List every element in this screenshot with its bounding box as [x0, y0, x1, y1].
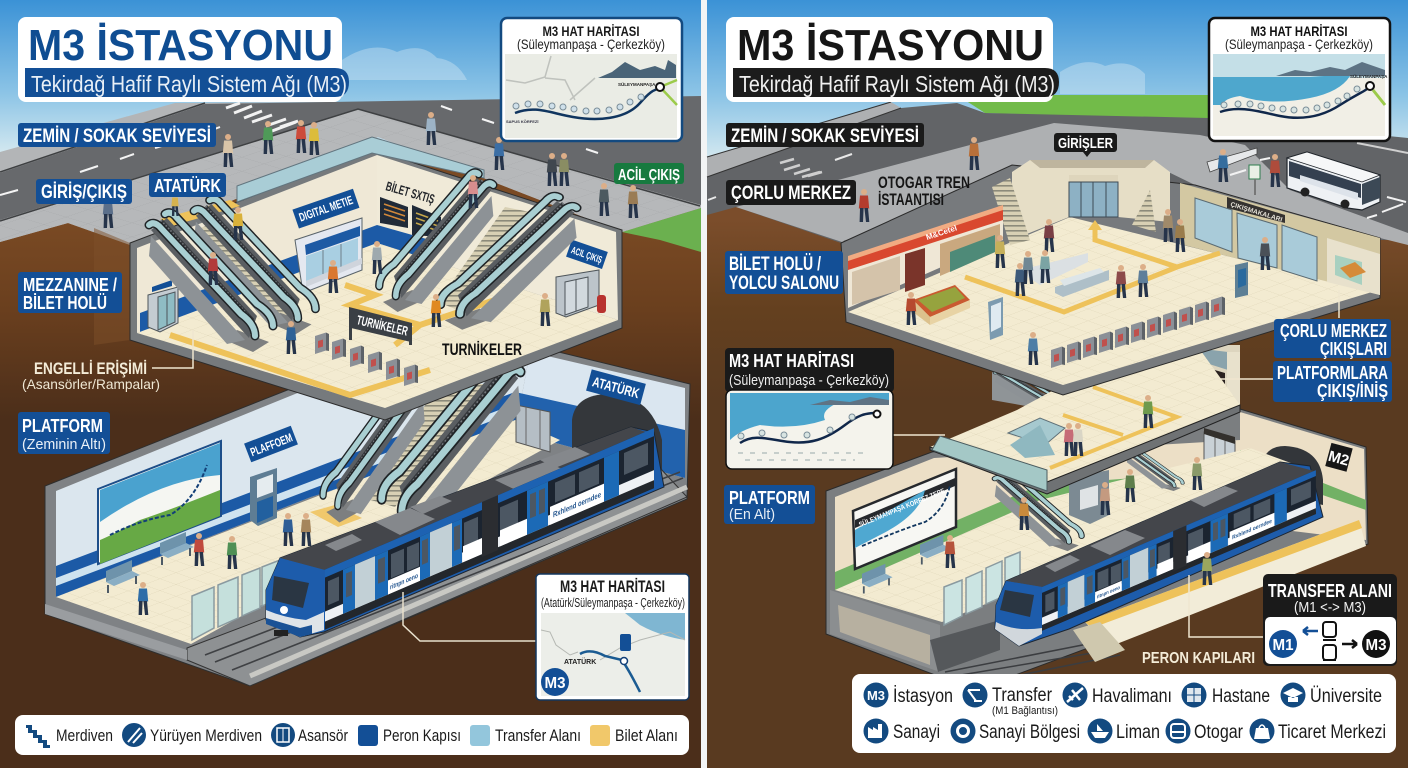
arrows and trains [1303, 622, 1357, 660]
glass wall [1180, 183, 1380, 295]
label: platformlara [1215, 361, 1392, 402]
label: çorlu merkez: ÇORLU MERKEZ [731, 183, 851, 204]
sign: atatürk: ATATÜRK [591, 373, 641, 401]
background: streets [707, 102, 1408, 245]
label: acil çıkış: ACİL ÇIKIŞ [618, 166, 680, 184]
glass gates right [944, 552, 1020, 625]
label: atatürk: ATATÜRK [154, 176, 221, 196]
title card right: M3 İSTASYONU [737, 21, 1044, 70]
floor: platform [56, 420, 560, 644]
map card: bottom left: (Atatürk/Süleymanpaşa - Çerkezköy) [541, 595, 685, 610]
label: bilet holü [725, 251, 843, 294]
label: otogar tren istasyonu: İSTAANTISI [878, 190, 944, 209]
elevator platform [516, 405, 550, 452]
yellow entry [160, 200, 240, 226]
map card: top right: M3 HAT HARİTASI [1250, 23, 1348, 39]
dark sign band [1122, 345, 1240, 407]
sign: acil çıkış [566, 240, 608, 269]
icon: stairs [26, 725, 50, 748]
benches right [862, 535, 951, 594]
map card: bottom left: M3 HAT HARİTASI [560, 577, 665, 596]
legend: otogar: Otogar [1194, 722, 1244, 743]
label: giriş çıkış [36, 179, 132, 204]
stairs right [438, 207, 530, 315]
title card right: Tekirdağ Hafif Raylı Sistem Ağı (M3) [739, 71, 1055, 97]
icon: shopping [1250, 718, 1274, 744]
floor: platform [835, 448, 1310, 622]
escalators right [379, 173, 577, 330]
tracks right [945, 640, 1120, 684]
label: platform en alt [724, 485, 815, 524]
label: platform [18, 412, 110, 454]
label: peron kapıları: PERON KAPILARI [1142, 650, 1255, 667]
swatch: peron kapısı [358, 725, 378, 746]
panel: right concourse [841, 160, 1380, 395]
icon: airport [1062, 682, 1088, 708]
label: girişler [1054, 133, 1117, 157]
icon: m3 istasyon [864, 682, 888, 708]
turnstiles right [1051, 296, 1225, 368]
map card: top left: M3 HAT HARİTASI [542, 23, 640, 39]
elevator right [1204, 428, 1235, 484]
person on middle level [1064, 395, 1153, 456]
title card left [18, 17, 349, 102]
bus stop sign [1249, 165, 1260, 195]
sign: platform: PLAFFOEM [248, 431, 294, 459]
legend: hastane: Hastane [1212, 686, 1270, 707]
legend: istasyon: İstasyon [893, 686, 953, 707]
map card: top right: SÜLEYMANPAŞA [1350, 73, 1388, 79]
legend: merdiven: Merdiven [56, 726, 113, 745]
label: atatürk [149, 173, 226, 197]
label: çorlu merkez çıkışları [1274, 290, 1391, 359]
transfer panel [1263, 574, 1397, 666]
title card left: Tekirdağ Hafif Raylı Sistem Ağı (M3) [31, 71, 347, 97]
label: mezzanine: MEZZANINE / [23, 275, 117, 295]
floor: middle [930, 340, 1240, 482]
label: platform en alt: (En Alt) [729, 506, 775, 523]
label: giriş çıkış: GİRİŞ/ÇIKIŞ [41, 182, 127, 203]
floor: concourse [848, 217, 1372, 385]
icon: m3: M3 [1366, 637, 1387, 654]
ticket kiosk [250, 468, 277, 526]
map card: bottom left: ATATÜRK [564, 657, 596, 666]
sign: atatürk [586, 369, 646, 405]
sign: acil çıkış: ACIL ÇIKIŞ [570, 245, 604, 266]
mural right [853, 469, 956, 569]
label: platform en alt: PLATFORM [729, 488, 810, 508]
bus stop shelter [1207, 148, 1257, 172]
glass gates [192, 560, 280, 640]
map card: top left [501, 18, 682, 141]
map card: bottom left [403, 574, 689, 700]
title card right [726, 17, 1059, 102]
mural right: SÜLEYMANPAŞA KORFEZ TEPE [857, 486, 946, 529]
label: mezzanine [18, 272, 122, 313]
yellow tactile paths [170, 285, 510, 395]
sign: bilet satış: BİLET SXTIŞ [384, 178, 437, 207]
storefront [848, 205, 1003, 308]
label: mezzanine: BİLET HOLÜ [23, 293, 107, 313]
elevator left [148, 280, 178, 332]
icon: university [1280, 682, 1306, 708]
legend: transfer: Transfer [992, 685, 1053, 706]
info desk [1028, 253, 1109, 297]
sign: turnikeler: TURNİKELER [355, 312, 410, 339]
yellow path [1050, 387, 1177, 468]
kiosk [988, 297, 1003, 340]
ticket booth [295, 218, 362, 293]
panel: right middle level [930, 340, 1240, 494]
glass opening [1008, 418, 1065, 458]
icon: port [1088, 718, 1112, 744]
legend: sanayi: Sanayi [893, 722, 940, 743]
panel: left platform level [15, 17, 690, 755]
label: acil çıkış [614, 163, 684, 184]
icon: hospital [1182, 682, 1206, 708]
people: left [103, 112, 638, 615]
elevator right [556, 270, 599, 317]
divider [701, 0, 707, 768]
background: grass [957, 95, 1215, 120]
legend: bilet alanı: Bilet Alanı [615, 726, 678, 745]
icon: elevator [271, 723, 295, 747]
benches [106, 532, 194, 593]
panel: right station [707, 0, 1408, 768]
escalator behind [992, 369, 1063, 412]
label: engelli erişimi: ENGELLİ ERİŞİMİ [34, 359, 147, 378]
icon: gear [950, 718, 976, 744]
escalator to platform right [995, 472, 1082, 551]
escalators to platform [323, 356, 521, 532]
icon: escalator [122, 723, 146, 747]
legend: ticaret merkezi: Ticaret Merkezi [1278, 722, 1386, 743]
sign: m2: M2 [1326, 448, 1351, 470]
sign: m2 [1325, 443, 1353, 472]
column [1069, 470, 1109, 524]
icon: industry [864, 718, 888, 744]
legend: havalimanı: Havalimanı [1092, 686, 1172, 707]
legend: transfer alanı: Transfer Alanı [495, 726, 581, 745]
escalators left [149, 199, 315, 352]
recess under platform [830, 590, 1000, 672]
swatch: bilet alanı [590, 725, 610, 746]
seam in earth [94, 228, 130, 345]
legend: transfer: (M1 Bağlantısı) [992, 705, 1058, 717]
swatch: transfer alanı [470, 725, 490, 746]
map card: top right: (Süleymanpaşa - Çerkezköy) [1225, 36, 1373, 52]
label: bilet holü: BİLET HOLÜ / [729, 254, 822, 275]
label: platform: PLATFORM [22, 416, 103, 436]
icon: m3 istasyon: M3 [867, 688, 885, 703]
second escalator right [1127, 449, 1183, 491]
transfer panel: (M1 <-> M3) [1294, 599, 1366, 616]
background: sky [0, 0, 701, 155]
label: turnikeler: TURNİKELER [442, 340, 522, 359]
panel: left mezzanine [130, 150, 622, 420]
sign: platform [244, 426, 298, 462]
legend left [15, 715, 689, 755]
label: bilet holü: YOLCU SALONU [729, 273, 839, 294]
map card: top left: SÜLEYMANPAŞA [618, 81, 656, 87]
mural map [98, 441, 221, 564]
label: otogar tren istasyonu [878, 173, 970, 209]
title card left: M3 İSTASYONU [28, 21, 333, 70]
background: sky [707, 0, 1408, 160]
legend right [852, 674, 1396, 753]
icon: m1: M1 [1272, 637, 1294, 654]
back wall pavilion [1012, 160, 1170, 240]
legend: peron kapısı: Peron Kapısı [383, 726, 461, 745]
map card: middle right [725, 348, 945, 469]
map card: middle right: M3 HAT HARİTASI [729, 351, 854, 371]
map card: bottom left: M3 [544, 675, 566, 692]
label: peron kapıları [1142, 575, 1264, 667]
label: engelli erişimi [22, 330, 193, 392]
legend: transfer [992, 685, 1058, 717]
legend: asansör: Asansör [298, 726, 348, 745]
label: çorlu merkez çıkışları: ÇIKIŞLARI [1320, 339, 1387, 359]
fire extinguisher [597, 295, 606, 313]
sign: digital metie: DIGITAL METIE [297, 193, 355, 224]
bus [1287, 152, 1380, 210]
legend: üniversite: Üniversite [1310, 686, 1382, 707]
label: otogar tren istasyonu: OTOGAR TREN [878, 173, 970, 192]
departure boards [380, 197, 441, 237]
sign: turnikeler [349, 307, 412, 345]
label: girişler: GİRİŞLER [1058, 135, 1113, 152]
icon: bus [1166, 718, 1190, 744]
map card: middle right: (Süleymanpaşa - Çerkezköy) [729, 372, 889, 389]
stairs pavilion [992, 178, 1156, 245]
turnstiles left [315, 332, 418, 386]
front platform [1085, 520, 1366, 647]
tunnel [572, 394, 662, 490]
storefront: M&Cetel [925, 223, 958, 242]
train [266, 427, 664, 637]
label: zemin: ZEMİN / SOKAK SEVİYESİ [23, 126, 211, 147]
label: engelli erişimi: (Asansörler/Rampalar) [22, 376, 160, 392]
label: zemin right: ZEMİN / SOKAK SEVİYESİ [731, 126, 919, 147]
track bed [45, 468, 687, 686]
background: streets [0, 96, 701, 245]
map card: top left: (Süleymanpaşa - Çerkezköy) [517, 36, 665, 52]
label: platform: (Zeminin Altı) [22, 436, 106, 453]
ticket kiosk right [1235, 262, 1248, 298]
legend: sanayi bölgesi: Sanayi Bölgesi [979, 722, 1080, 743]
train right [995, 462, 1323, 646]
exit wall [1327, 238, 1380, 295]
floor: mezzanine [137, 243, 618, 408]
tunnel right [1263, 446, 1323, 505]
glass wall: ÇIKIŞMAKALARI [1229, 201, 1283, 224]
glass railing [932, 436, 1047, 491]
sign: digital metie [292, 189, 359, 229]
yellow tactile path right [965, 220, 1220, 312]
stairs front [1073, 622, 1125, 662]
icon: transfer [962, 682, 988, 708]
stairs left [192, 222, 296, 325]
map card: top left: SAPUS KÖRFEZİ [506, 119, 538, 124]
background: grass [622, 208, 701, 252]
glass railing [237, 137, 484, 202]
legend: yürüyen merdiven: Yürüyen Merdiven [150, 726, 262, 745]
panel: right platform level [826, 409, 1368, 690]
map card: top right [1209, 18, 1390, 141]
legend: liman: Liman [1116, 722, 1160, 743]
people: right [859, 137, 1280, 585]
label: çorlu merkez [726, 180, 856, 205]
fruit stand [913, 285, 970, 325]
label: platformlara: ÇIKIŞ/İNİŞ [1317, 381, 1388, 401]
